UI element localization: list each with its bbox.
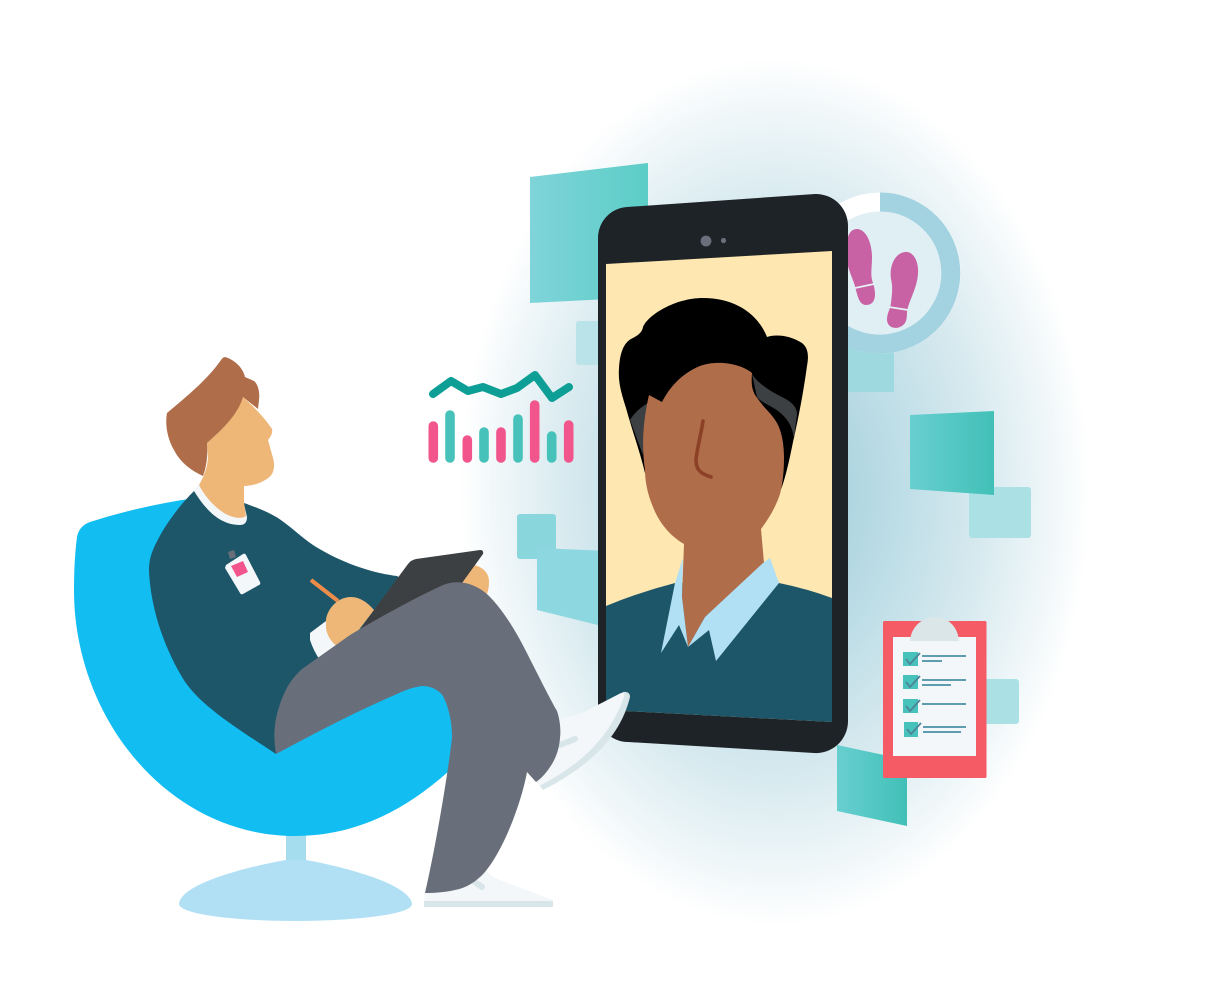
ring white segment (809, 202, 951, 344)
checklist ticks (906, 653, 921, 734)
hair (166, 357, 259, 476)
badge (225, 550, 260, 594)
raised shoe upper (535, 693, 624, 786)
phone (598, 194, 848, 753)
badge card (225, 554, 260, 594)
clipboard board (883, 621, 986, 778)
badge clip (228, 550, 236, 559)
chair shell (74, 498, 470, 836)
raised shoe lace (560, 739, 575, 745)
raised shoe sole (537, 692, 630, 790)
doctor on screen (606, 298, 832, 725)
shoe sole (424, 901, 553, 907)
shoe lace (472, 880, 482, 887)
raised shoe (535, 692, 630, 790)
shoe upper (424, 870, 553, 906)
icon: left footprint (846, 229, 875, 305)
teal bars (450, 415, 552, 458)
ring progress arc (818, 202, 951, 344)
hand (326, 597, 374, 646)
tile: small right (969, 487, 1031, 538)
clipboard clip (910, 617, 959, 641)
camera sensor (721, 238, 726, 243)
phone screen (606, 251, 832, 722)
pencil (311, 580, 338, 601)
doctor neck and face (643, 363, 784, 647)
neck and face (199, 397, 274, 518)
tile: small top left (576, 321, 610, 365)
background glow (460, 58, 1090, 926)
doctor collar right (688, 558, 779, 661)
clipboard (883, 617, 986, 778)
floating teal tiles (517, 163, 1031, 826)
chart: line and bars (433, 375, 569, 458)
trend line (433, 375, 569, 398)
shirt collar (194, 484, 247, 525)
pink bars (433, 405, 569, 458)
tile: small mid left (517, 514, 556, 559)
chair (74, 498, 470, 921)
doctor hair highlight right (752, 374, 797, 438)
shirt cuff (310, 621, 337, 660)
doctor hair (619, 298, 808, 492)
far hand (455, 564, 489, 596)
chair base (179, 860, 412, 921)
doctor nose line (696, 421, 711, 477)
tile: bottom right (837, 745, 907, 826)
trousers (274, 582, 560, 893)
tile: behind clipboard (975, 679, 1019, 724)
patient (149, 357, 630, 907)
step count ring (809, 202, 951, 344)
lower shoe (424, 870, 553, 907)
camera lens (701, 236, 711, 246)
sweater (149, 491, 420, 754)
tile: large right (910, 411, 994, 495)
checklist lines (922, 656, 966, 732)
tablet (355, 550, 483, 637)
chair stem (286, 830, 306, 862)
tile: under ring (840, 335, 894, 392)
footprint dividers (855, 284, 908, 310)
doctor hair highlight left (630, 403, 648, 455)
checklist boxes (903, 652, 918, 737)
doctor collar left (661, 558, 688, 653)
tile: medium mid left (537, 548, 610, 628)
clipboard paper (893, 637, 976, 756)
ring inner (818, 211, 942, 335)
phone body (598, 194, 848, 753)
badge photo (231, 561, 248, 577)
tile: large top left (530, 163, 648, 303)
illustration: telehealth consultation (74, 86, 1070, 921)
icon: right footprint (887, 252, 918, 328)
doctor sweater (606, 583, 832, 725)
